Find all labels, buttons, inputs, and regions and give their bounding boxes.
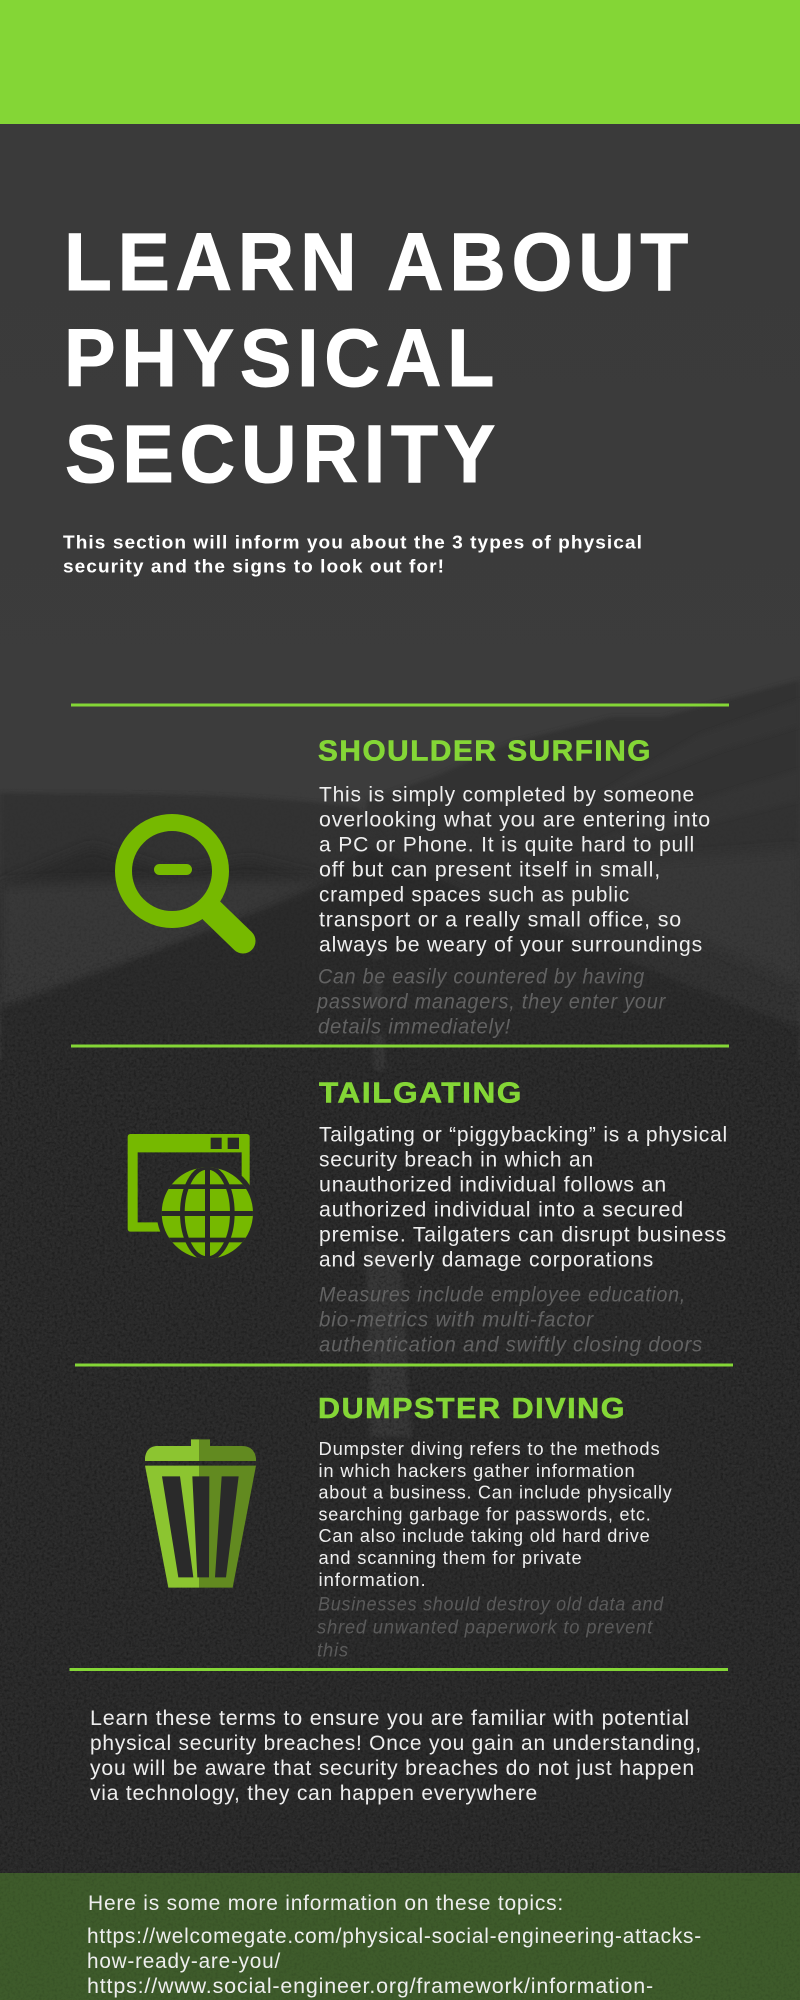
icon: magnifying glass	[124, 822, 243, 941]
source links: https://welcomegate.com/physical-social-engineering-attacks-	[87, 1925, 702, 1948]
divider 2	[71, 1044, 729, 1048]
title: SECURITY	[65, 409, 501, 500]
source links	[87, 1925, 702, 1998]
closing text: you will be aware that security breaches do not just happen	[90, 1757, 695, 1780]
title: LEARN ABOUT	[64, 217, 694, 308]
body text: shoulder surfing: off but can present itself in small,	[319, 859, 661, 882]
body text: tailgating: security breach in which an	[319, 1149, 594, 1172]
body text: shoulder surfing	[319, 784, 711, 957]
note: shoulder surfing countermeasure: details immediately!	[318, 1015, 511, 1038]
body text: dumpster diving	[318, 1439, 672, 1590]
body text: dumpster diving: Can also include taking old hard drive	[318, 1526, 650, 1546]
body text: tailgating: authorized individual into a secured	[319, 1199, 684, 1222]
intro text: This section will inform you about the 3 types of physical	[63, 533, 643, 553]
body text: shoulder surfing: cramped spaces such as public	[319, 884, 630, 907]
note: tailgating countermeasure: authentication and swiftly closing doors	[319, 1334, 703, 1357]
intro text: security and the signs to look out for!	[63, 556, 445, 576]
note: tailgating countermeasure: Measures include employee education,	[319, 1284, 686, 1307]
body text: shoulder surfing: always be weary of your surroundings	[319, 934, 703, 957]
icon: browser window and globe	[128, 1134, 258, 1264]
heading: shoulder surfing: SHOULDER SURFING	[318, 736, 652, 768]
divider 3	[75, 1364, 733, 1366]
note: shoulder surfing countermeasure	[316, 965, 666, 1038]
body text: tailgating: and severly damage corporations	[319, 1249, 654, 1272]
body text: dumpster diving: Dumpster diving refers to the methods	[318, 1439, 660, 1459]
body text: shoulder surfing: a PC or Phone. It is quite hard to pull	[319, 834, 695, 857]
panel: shoulder surfing	[124, 736, 711, 1038]
note: dumpster diving countermeasure: Businesses should destroy old data and	[318, 1595, 665, 1616]
note: dumpster diving countermeasure	[317, 1595, 665, 1662]
closing text: Learn these terms to ensure you are familiar with potential	[90, 1707, 690, 1730]
closing text: physical security breaches! Once you gain an understanding,	[90, 1732, 702, 1755]
note: shoulder surfing countermeasure: password managers, they enter your	[316, 990, 666, 1013]
title: PHYSICAL	[64, 313, 500, 404]
body text: dumpster diving: information.	[318, 1570, 426, 1590]
body text: dumpster diving: and scanning them for private	[318, 1548, 582, 1568]
sources intro: Here is some more information on these topics:	[88, 1892, 564, 1915]
body text: shoulder surfing: transport or a really small office, so	[319, 909, 682, 932]
heading: dumpster diving: DUMPSTER DIVING	[318, 1393, 626, 1425]
note: tailgating countermeasure	[319, 1284, 703, 1357]
panel: dumpster diving	[145, 1393, 672, 1662]
background: dark road photo	[0, 477, 800, 1873]
source links: https://www.social-engineer.org/framework/information-	[87, 1975, 654, 1998]
body text: tailgating	[319, 1124, 728, 1272]
source links: how-ready-are-you/	[87, 1950, 281, 1973]
body text: shoulder surfing: This is simply completed by someone	[319, 784, 695, 807]
bottom green band	[0, 1873, 800, 2000]
note: tailgating countermeasure: bio-metrics with multi-factor	[319, 1309, 594, 1332]
intro text	[63, 533, 643, 576]
body text: tailgating: Tailgating or “piggybacking” is a physical	[319, 1124, 728, 1147]
divider 1	[71, 704, 729, 706]
body text: dumpster diving: in which hackers gather information	[318, 1461, 636, 1481]
body text: dumpster diving: searching garbage for passwords, etc.	[318, 1504, 652, 1524]
body text: shoulder surfing: overlooking what you are entering into	[319, 809, 711, 832]
closing text	[90, 1707, 702, 1805]
closing text: via technology, they can happen everywhere	[90, 1782, 538, 1805]
top green band	[0, 0, 800, 124]
icon: trash can	[145, 1439, 256, 1588]
heading: tailgating: TAILGATING	[319, 1078, 523, 1110]
body text: tailgating: unauthorized individual follows an	[319, 1174, 667, 1197]
body text: dumpster diving: about a business. Can include physically	[318, 1483, 672, 1503]
note: dumpster diving countermeasure: shred unwanted paperwork to prevent	[317, 1618, 653, 1639]
note: dumpster diving countermeasure: this	[317, 1641, 349, 1662]
divider 4	[70, 1668, 728, 1671]
panel: tailgating	[128, 1078, 728, 1357]
title	[64, 217, 694, 500]
body text: tailgating: premise. Tailgaters can disrupt business	[319, 1224, 727, 1247]
note: shoulder surfing countermeasure: Can be easily countered by having	[318, 965, 645, 988]
